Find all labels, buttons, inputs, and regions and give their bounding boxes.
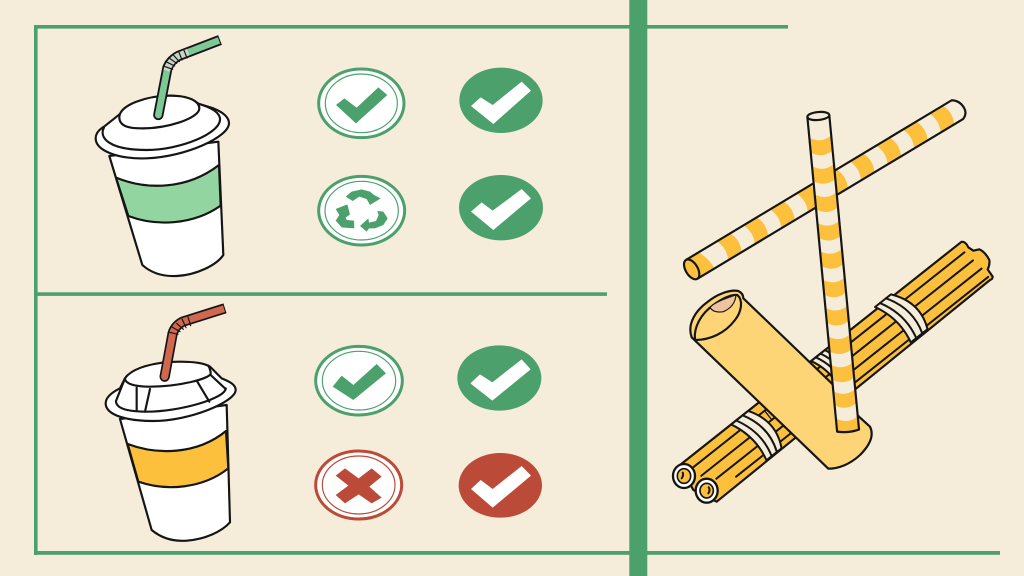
icon: outlined check <box>316 346 402 415</box>
icon: outlined red cross <box>316 451 402 519</box>
icon: filled check <box>459 68 543 133</box>
panel: top cup, green straw <box>96 40 229 276</box>
icon: filled red check <box>459 453 542 518</box>
icon group: bottom cup badges <box>316 345 542 519</box>
icon: outlined check <box>319 69 404 138</box>
straw opening 2 <box>696 479 718 503</box>
illustration: striped diagonal straw <box>681 97 969 282</box>
icon: filled check 2 <box>459 175 543 240</box>
icon: recycle badge <box>319 176 405 245</box>
illustration: wide yellow straw <box>690 291 872 469</box>
illustration: tied bundle of straws <box>673 240 993 503</box>
icon group: top cup badges <box>319 68 543 245</box>
icon: filled check <box>457 345 541 411</box>
straw opening 1 <box>673 464 695 488</box>
panel: bottom cup, red straw <box>106 308 236 541</box>
illustration: striped vertical straw <box>807 111 859 433</box>
